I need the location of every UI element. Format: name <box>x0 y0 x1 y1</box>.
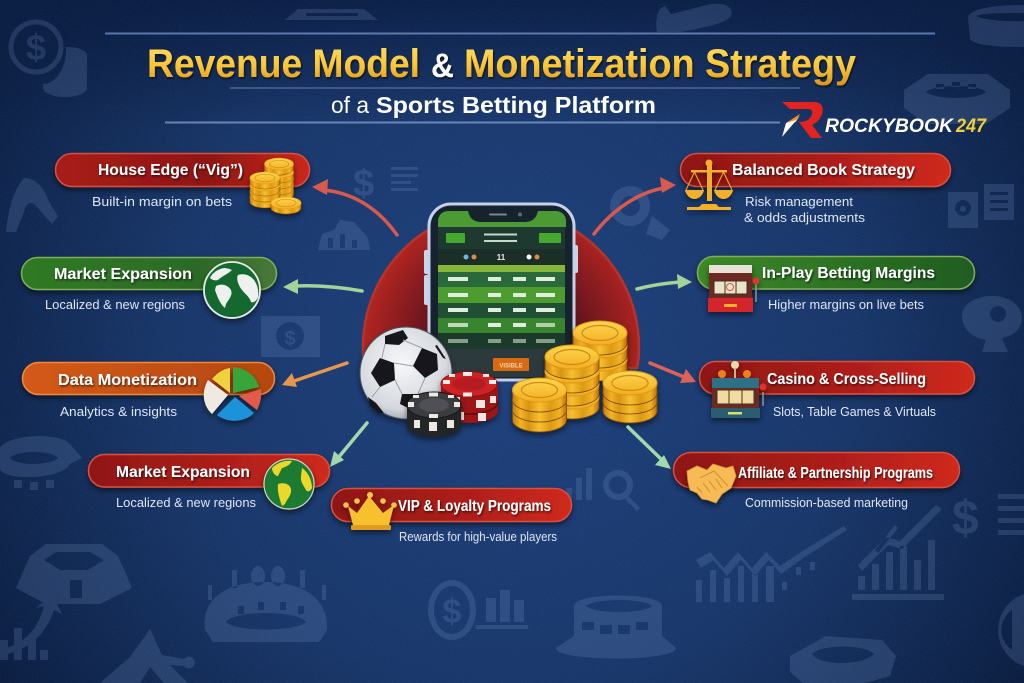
icon: lock and list <box>948 184 1014 228</box>
phone: VISIBLE <box>499 364 523 370</box>
icon: bars cloud <box>318 220 370 250</box>
subtitle bold: Sports Betting Platform <box>376 92 656 118</box>
phone button <box>438 349 565 377</box>
title rule middle <box>230 87 800 89</box>
title block <box>105 34 935 122</box>
arrow: balanced book <box>594 177 676 234</box>
icon: stadium top <box>285 9 378 20</box>
arrow: affiliate <box>628 427 671 469</box>
arrows <box>282 177 696 469</box>
heading: In-Play Betting Margins <box>762 265 935 282</box>
description: Built-in margin on bets <box>92 195 232 209</box>
icon: stadium left <box>0 436 82 490</box>
icon: dollar lines right: $ <box>952 492 979 545</box>
icon: player <box>100 629 195 683</box>
icon: sports figure <box>6 178 58 232</box>
icon: pie chart <box>204 367 261 421</box>
icon: stadium lower left <box>16 544 132 604</box>
arrow: in-play <box>637 274 692 289</box>
icon: scales <box>685 160 733 210</box>
icon: rising chart <box>852 505 944 600</box>
phone odds table <box>438 265 565 349</box>
panel: casino and cross-selling <box>700 361 974 419</box>
description line 2: & odds adjustments <box>744 211 865 225</box>
panel: balanced book <box>680 154 950 225</box>
icon: plane <box>656 4 732 32</box>
red half circle <box>363 209 639 368</box>
logo: Rockybook247 <box>782 102 987 138</box>
subtitle: of a <box>331 92 369 118</box>
icon: stadium upper right <box>904 74 1010 124</box>
red casino chips <box>441 372 498 423</box>
description: Localized & new regions <box>45 298 185 312</box>
panel: in-play margins <box>698 256 974 312</box>
arrow: casino <box>650 363 696 383</box>
phone <box>424 204 578 380</box>
pill <box>22 362 274 394</box>
black casino chips <box>407 392 461 437</box>
title: revenue model: Revenue Model <box>147 42 420 86</box>
pill <box>22 258 276 290</box>
icon: tag <box>646 216 670 240</box>
logo mark R <box>782 102 823 138</box>
heading: Affiliate & Partnership Programs <box>738 465 933 482</box>
pill <box>88 454 330 487</box>
icon: bars and magnifier <box>566 468 640 511</box>
heading: Market Expansion <box>54 266 192 283</box>
pill <box>332 488 572 522</box>
description: Higher margins on live bets <box>768 298 924 312</box>
coins middle stack <box>545 345 599 419</box>
icon: coin <box>610 186 650 226</box>
description: Analytics & insights <box>60 405 177 419</box>
phone header <box>438 211 566 227</box>
pill <box>700 362 974 394</box>
phone scoreboard <box>438 249 565 265</box>
logo number: 247 <box>955 116 987 137</box>
icon: globe right <box>998 594 1024 666</box>
panel: data monetization <box>22 362 274 421</box>
logo wordmark: ROCKYBOOK <box>825 116 954 137</box>
arrow: market expansion <box>283 279 362 294</box>
icon: globe head <box>962 296 1022 352</box>
icon: round stadium <box>556 596 676 658</box>
icon: dollar lines: $ <box>353 163 374 205</box>
icon: wallet dollar <box>261 316 320 357</box>
icon: coin ring <box>968 5 1024 47</box>
icon: dollar lines <box>353 163 418 205</box>
icon: dollar coin stack <box>11 22 87 97</box>
description: Slots, Table Games & Virtuals <box>773 405 936 419</box>
icon: big stadium <box>205 566 327 642</box>
icon: line chart <box>696 526 847 602</box>
arrow: house edge <box>312 179 397 235</box>
icon: dollar magnifier <box>428 580 528 640</box>
panel: market expansion green <box>22 258 276 318</box>
soccer ball <box>360 327 452 419</box>
panel: market expansion red <box>88 454 330 510</box>
gold coin stacks <box>512 321 657 432</box>
title: monetization strategy: Monetization Strategy <box>464 42 857 86</box>
icon: globe <box>204 262 260 318</box>
icon: trend arrow left <box>0 594 62 660</box>
arrow: data monetization <box>282 363 347 387</box>
heading: Market Expansion <box>116 464 250 481</box>
title: ampersand: & <box>431 47 454 85</box>
heading: Casino & Cross-Selling <box>767 371 926 388</box>
icon: slot machine <box>711 361 766 418</box>
icon: crown <box>343 492 397 530</box>
pill <box>698 256 974 289</box>
icon: dollar magnifier: $ <box>443 593 462 631</box>
coins back stack <box>573 321 627 381</box>
heading: VIP & Loyalty Programs <box>398 498 551 515</box>
coins right stack <box>603 371 657 423</box>
heading: Balanced Book Strategy <box>732 162 915 179</box>
phone toolbar <box>438 227 565 249</box>
panel: affiliate and partnership <box>674 452 960 510</box>
panel: house edge <box>56 154 310 214</box>
description line 1: Risk management <box>745 195 854 209</box>
pill <box>674 452 960 488</box>
pill <box>56 154 310 186</box>
icon: globe <box>264 459 314 509</box>
title rule top <box>105 32 935 34</box>
icon: wallet dollar: $ <box>284 328 296 350</box>
heading: Data Monetization <box>58 372 197 389</box>
panel: vip and loyalty <box>332 488 572 544</box>
coins front stack <box>512 378 566 432</box>
description: Commission-based marketing <box>745 496 908 510</box>
central illustration <box>360 204 657 437</box>
icon: slot machine <box>708 265 760 312</box>
description: Localized & new regions <box>116 496 256 510</box>
icon: dollar coin stack: $ <box>26 27 46 68</box>
description: Rewards for high-value players <box>399 530 557 544</box>
icon: stadium lower right <box>790 636 896 683</box>
icon: dollar lines right <box>952 492 1024 545</box>
title rule bottom <box>165 122 780 124</box>
icon: coins <box>250 158 301 214</box>
phone: 11 <box>497 253 506 262</box>
heading: House Edge (“Vig”) <box>98 162 243 179</box>
arrow: market expansion lower <box>330 423 367 467</box>
icon: handshake <box>687 464 736 503</box>
pill <box>680 154 950 186</box>
